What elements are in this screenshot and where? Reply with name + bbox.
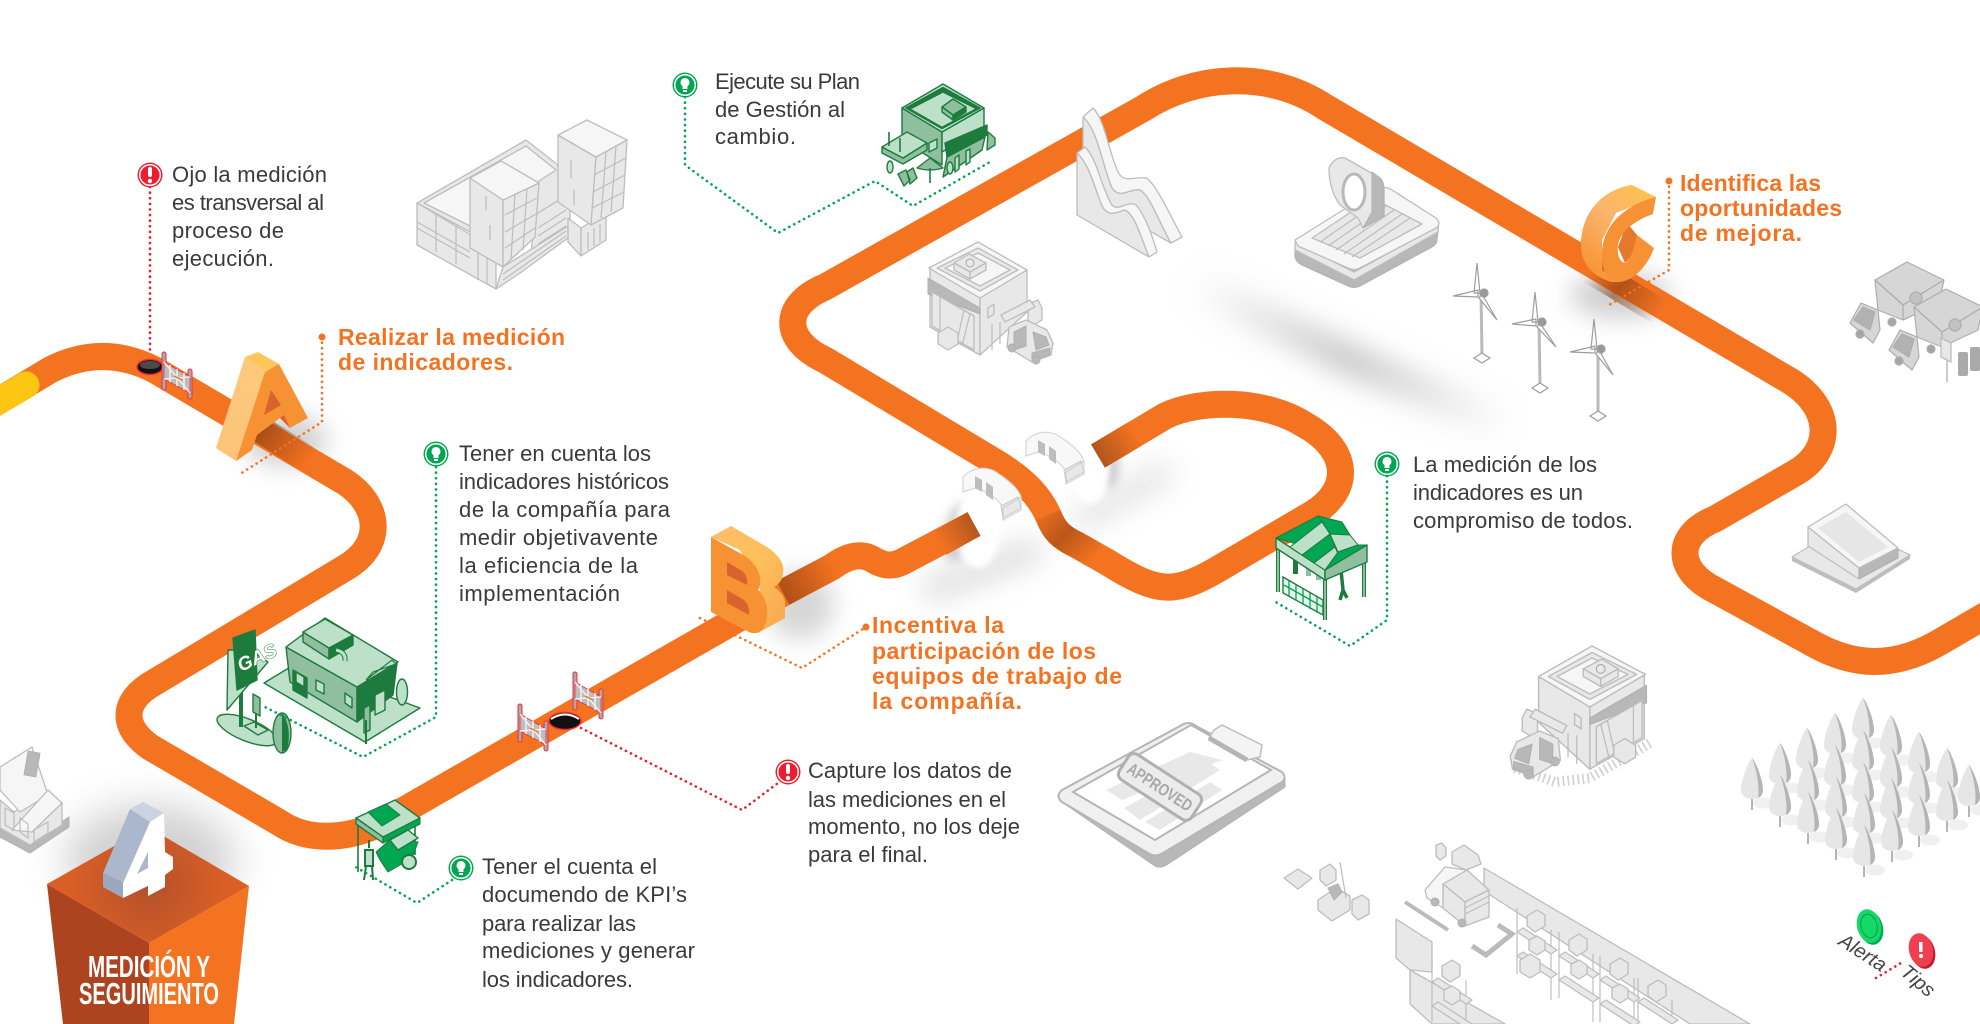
text: la medición de los [1413,452,1633,533]
heading A: Realizar la medición [338,324,565,350]
icon: gray recycling trucks [1850,262,1980,382]
icon: green legend disc [1853,907,1887,947]
number box: medición y seguimiento [47,802,249,1024]
text: ojo la medición: es transversal al [172,190,324,215]
connectors [150,97,1672,903]
icon: wind turbines [1453,263,1613,421]
icon: gray wave sculpture [1077,108,1182,257]
icon: green gas station: GAS [234,640,281,677]
legend label: alerta: Alerta [1834,929,1890,977]
icon: gray office building [417,120,627,289]
icon: gray clipboard approved: APPROVED [1124,759,1196,816]
icon: green store [882,84,995,186]
title [79,948,219,1011]
heading C: oportunidades [1680,195,1842,221]
title: MEDICIÓN Y [88,948,210,984]
heading B: la compañía. [872,688,1022,714]
heading C [1680,170,1842,246]
letter C [1581,185,1656,282]
icon: green food cart [356,800,420,880]
text: tener el cuenta: mediciones y generar [482,938,695,963]
text: tener en cuenta los: de la compañía para [459,497,671,522]
road shading overlays [245,270,1660,593]
icon: red alert 1 [138,162,162,188]
icon: gray clipboard approved [1058,723,1285,867]
ground shadow of underground road [65,271,1670,915]
letter B [711,526,785,633]
legend [1834,907,1939,1002]
icon: gray suitcase with pin [1295,158,1439,288]
heading B: equipos de trabajo de [872,663,1122,689]
text: tener en cuenta los: Tener en cuenta los [459,441,651,466]
text: ojo la medición [172,162,327,271]
icon: gray wedge block [1792,504,1910,593]
icon: gray shop top [928,242,1053,364]
number 4 [103,802,173,898]
orange road path, upper loop section [793,81,1980,662]
text: tener en cuenta los: indicadores históricos [459,469,669,494]
icon: red legend disc [1905,931,1939,971]
text: ejecute su plan [715,69,860,149]
icon: green tip 4 [1374,452,1400,476]
orange road path, lower left section [0,356,974,836]
heading A [338,324,565,375]
heading C: de mejora. [1680,220,1802,246]
tunnel mouths [938,420,1119,568]
text: la medición de los: La medición de los [1413,452,1597,477]
text: ojo la medición: Ojo la medición [172,162,327,187]
text: tener el cuenta [482,854,695,992]
icon: gray warehouse [1396,867,1750,1024]
heading B: participación de los [872,638,1096,664]
warehouse truck [1425,867,1489,927]
icon: gray shop bottom [1510,646,1646,779]
icon: green tip 3 [672,72,698,98]
text: ojo la medición: proceso de [172,218,284,243]
letter A [216,352,308,461]
text: capture los datos: momento, no los deje [808,814,1020,839]
arch one [963,468,1021,520]
title: SEGUIMIENTO [79,976,219,1011]
text: la medición de los: indicadores es un [1413,480,1583,505]
icon: manhole and barriers two [520,674,601,749]
icon: green market tent [1276,516,1367,620]
text: ejecute su plan: de Gestión al [715,97,845,122]
heading C: Identifica las [1680,170,1821,196]
text: tener el cuenta: los indicadores. [482,967,633,992]
icon: green gas station [213,618,420,753]
text: tener el cuenta: Tener el cuenta el [482,854,657,879]
text: tener en cuenta los [459,441,671,606]
yellow road start [0,385,26,412]
text: tener el cuenta: documendo de KPI’s [482,882,687,907]
icon: green tip 2 [448,856,474,880]
legend label: tips: Tips [1896,961,1939,1002]
text: capture los datos: para el final. [808,842,928,867]
icon: gray forest [1741,698,1980,877]
icon: green tip 1 [424,442,448,466]
text: tener en cuenta los: medir objetivavente [459,525,658,550]
text: tener en cuenta los: la eficiencia de la [459,553,639,578]
text: capture los datos [808,758,1020,867]
text: tener el cuenta: para realizar las [482,911,636,936]
text: ojo la medición: ejecución. [172,246,274,271]
heading B [872,612,1122,714]
heading B: Incentiva la [872,612,1004,638]
icon: dotted shadow gray shop [1515,742,1652,782]
text: capture los datos: las mediciones en el [808,787,1006,812]
text: tener en cuenta los: implementación [459,581,620,606]
heading A: de indicadores. [338,349,513,375]
text: ejecute su plan: Ejecute su Plan [715,69,860,94]
icon: gray house [0,747,69,853]
text: la medición de los: compromiso de todos. [1413,508,1633,533]
icon: manhole and barrier one [137,354,190,397]
icon: gray forklift and boxes [1284,843,1481,921]
text: ejecute su plan: cambio. [715,124,796,149]
arch two [1026,432,1084,484]
text: capture los datos: Capture los datos de [808,758,1012,783]
icon: red alert 2 [776,760,800,784]
